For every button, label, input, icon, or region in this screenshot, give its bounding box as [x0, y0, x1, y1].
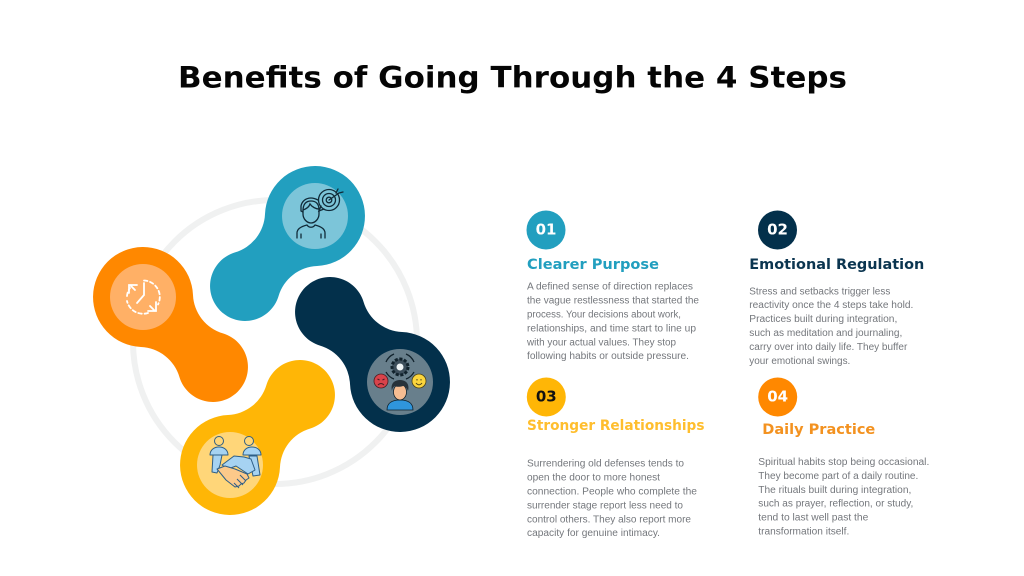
- icon: two people shaking hands: [210, 436, 261, 488]
- badge 03: [527, 378, 566, 416]
- heading: Daily Practice: [762, 422, 875, 438]
- panel: 02 emotional regulation: [749, 210, 924, 367]
- panel: 04 daily practice: [758, 378, 929, 538]
- body text: Practices built during integration,: [749, 314, 897, 325]
- icon: gear, faces and person: [374, 354, 426, 410]
- body text: Spiritual habits stop being occasional.: [758, 457, 929, 468]
- body text: carry over into daily life. They buffer: [749, 342, 908, 353]
- body text: transformation itself.: [758, 526, 849, 538]
- panel: orange blob with clock icon: [72, 226, 273, 427]
- badge 01: [526, 210, 566, 250]
- badge 03: 03: [536, 388, 557, 406]
- body text: A defined sense of direction replaces: [527, 282, 693, 293]
- body text: capacity for genuine intimacy.: [527, 528, 660, 539]
- body text: the vague restlessness that started the: [527, 296, 699, 307]
- icon: clock with cycle arrows: [127, 280, 160, 314]
- body text: [526, 282, 699, 362]
- heading: Emotional Regulation: [749, 257, 924, 273]
- body text: following habits or outside pressure.: [527, 351, 689, 362]
- panel: navy blob with emotions icon: [270, 252, 471, 453]
- body text: Surrendering old defenses tends to: [527, 459, 684, 470]
- badge 02: [758, 210, 797, 250]
- heading: Clearer Purpose: [527, 257, 659, 273]
- body text: your emotional swings.: [749, 356, 850, 367]
- badge 04: 04: [767, 388, 788, 406]
- icon: person with target: [297, 189, 343, 238]
- body text: process. Your decisions about work,: [527, 310, 681, 320]
- badge 02: 02: [767, 220, 788, 238]
- badge 04: [758, 378, 797, 416]
- body text: reactivity once the 4 steps take hold.: [749, 300, 913, 311]
- panel: 01 clearer purpose: [526, 210, 699, 362]
- body text: with your actual values. They stop: [526, 337, 676, 348]
- background ring: [133, 200, 417, 484]
- body text: relationships, and time start to line up: [527, 323, 696, 334]
- body text: [758, 457, 929, 538]
- body text: surrender stage report less need to: [527, 500, 683, 511]
- body text: tend to last well past the: [758, 513, 869, 524]
- body text: The rituals built during integration,: [758, 485, 911, 496]
- panel: teal blob with purpose icon: [185, 145, 386, 346]
- body text: open the door to more honest: [527, 473, 660, 484]
- body text: connection. People who complete the: [527, 486, 697, 498]
- heading: Stronger Relationships: [527, 418, 704, 434]
- body text: They become part of a daily routine.: [758, 471, 918, 482]
- panel: 03 stronger relationships: [527, 378, 704, 539]
- body text: [749, 286, 913, 367]
- body text: [527, 459, 697, 539]
- body text: such as meditation and journaling,: [749, 328, 902, 339]
- body text: such as prayer, reflection, or study,: [758, 499, 913, 510]
- badge 01: 01: [536, 220, 556, 238]
- body text: Stress and setbacks trigger less: [749, 286, 890, 297]
- body text: control others. They also report more: [527, 514, 691, 525]
- panel: yellow blob with handshake icon: [159, 335, 360, 536]
- title: Benefits of Going Through the 4 Steps: [178, 60, 847, 94]
